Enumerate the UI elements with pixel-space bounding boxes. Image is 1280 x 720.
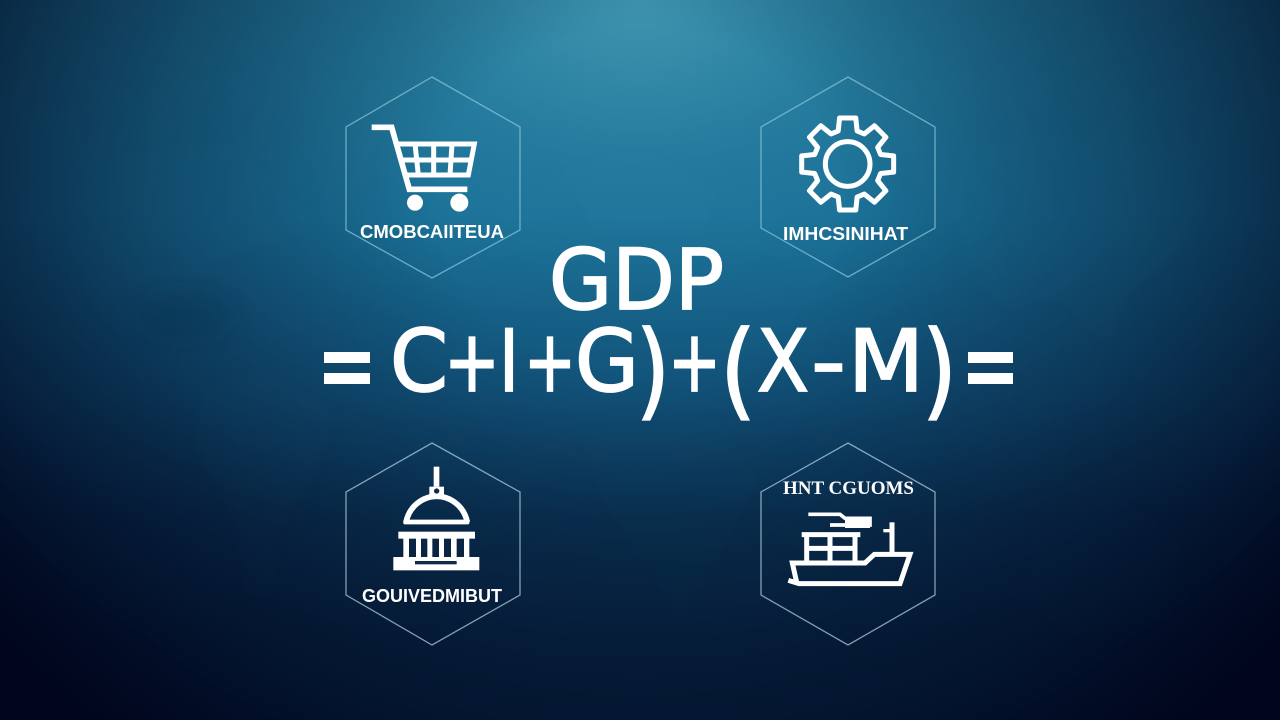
hexagon: net exports <box>761 443 935 645</box>
label: investment: IMHCSINIHAT <box>783 224 908 244</box>
formula: GDP equation: I <box>499 312 519 412</box>
panel: investment <box>761 77 935 277</box>
formula: GDP equation: + <box>524 312 576 412</box>
hexagon: consumption <box>346 77 520 278</box>
formula: GDP equation: + <box>668 312 721 412</box>
formula: GDP equation: ( <box>720 309 756 431</box>
world map backdrop <box>65 130 1220 640</box>
label: net exports: HNT CGUOMS <box>783 478 914 499</box>
formula: GDP equation: C <box>390 312 448 412</box>
panel: consumption <box>346 77 520 278</box>
title: GDP: GDP <box>549 231 724 329</box>
icon: shopping cart <box>372 127 474 212</box>
formula: GDP equation: ) <box>636 309 670 431</box>
formula: GDP equation: M <box>848 312 924 412</box>
hexagon: investment <box>761 77 935 277</box>
panel: net exports <box>761 443 935 645</box>
formula: GDP equation: G <box>575 312 639 412</box>
panel: government <box>346 443 520 645</box>
formula: GDP equation: ) <box>922 309 957 431</box>
icon: cargo ship <box>788 514 910 584</box>
formula: GDP equation: X <box>757 312 809 412</box>
icon: gear <box>802 118 894 210</box>
dark seas <box>135 291 235 339</box>
label: consumption: CMOBCAIITEUA <box>360 222 504 242</box>
icon: capitol building <box>393 467 479 570</box>
formula: GDP equation <box>324 309 1013 431</box>
label: government: GOUIVEDMIBUT <box>362 586 502 606</box>
formula: GDP equation: - <box>811 312 846 412</box>
hexagon: government <box>346 443 520 645</box>
formula: GDP equation: + <box>444 312 500 412</box>
